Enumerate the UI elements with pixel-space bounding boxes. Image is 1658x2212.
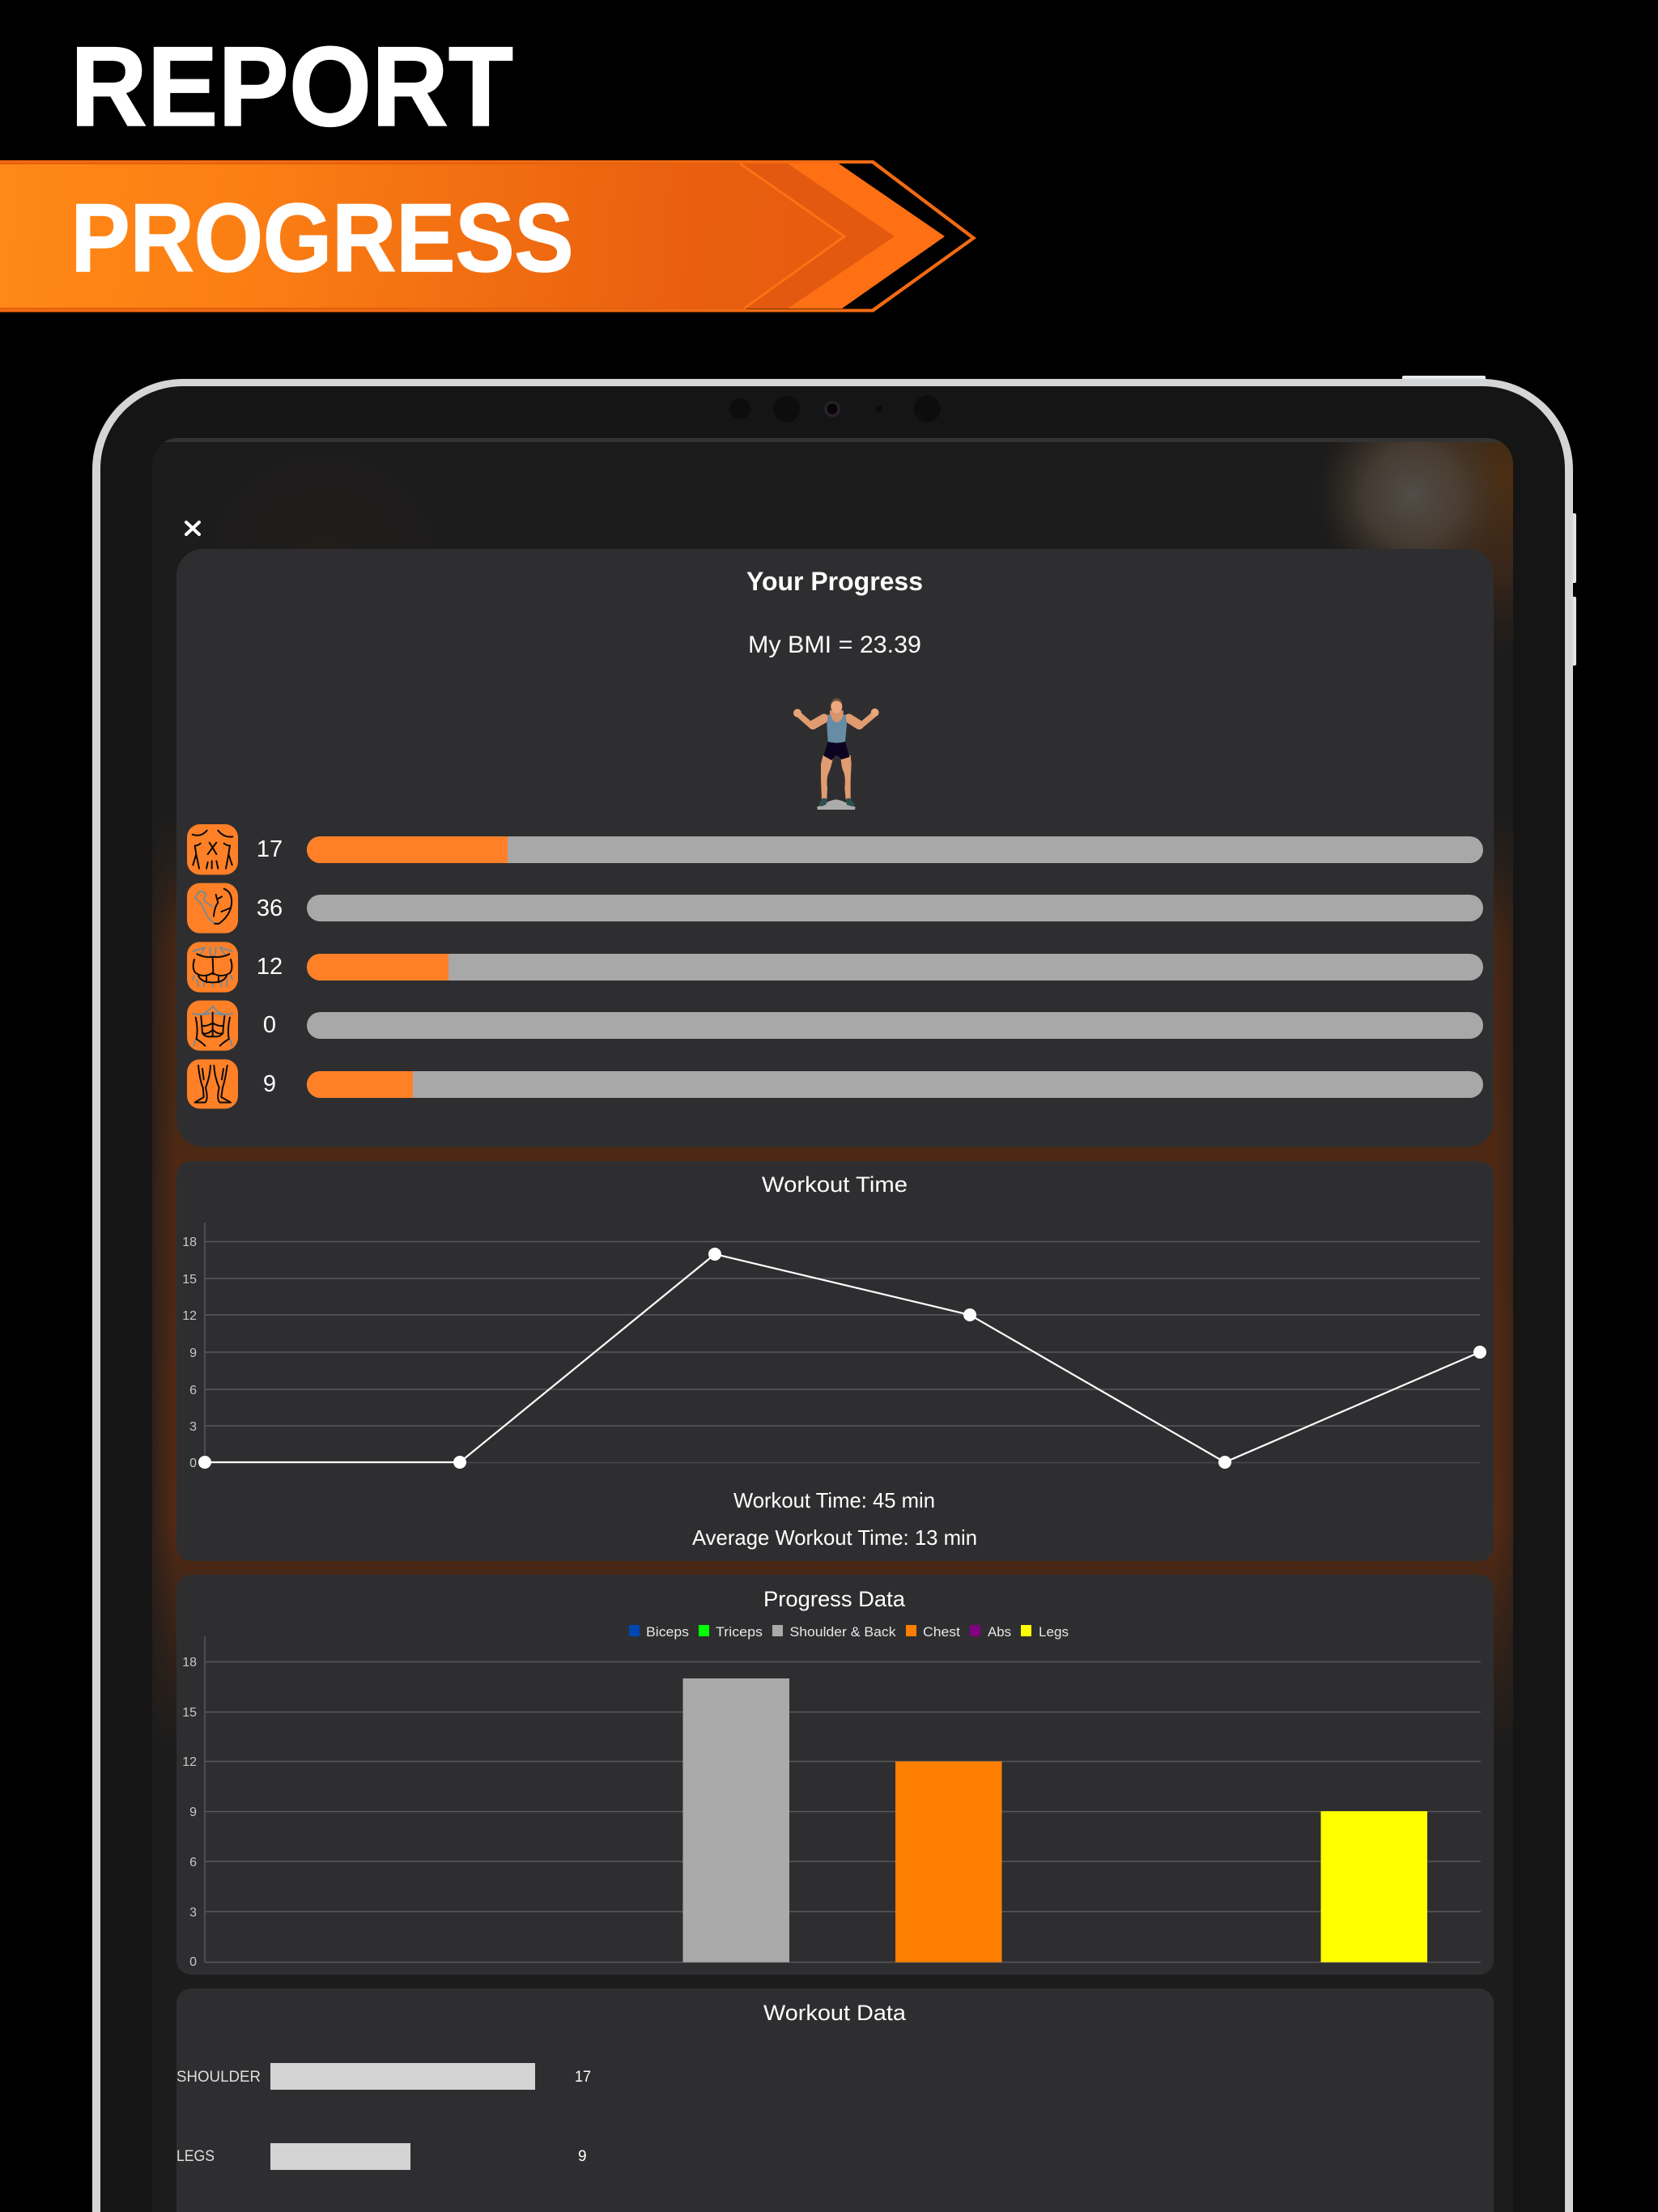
text: BMI value: My BMI = 23.39	[748, 632, 921, 658]
row: shoulder: 17	[575, 2069, 591, 2086]
bar chart: progress data: 0	[189, 1955, 197, 1969]
row: shoulder	[176, 2063, 591, 2090]
heading: your progress: Your Progress	[746, 567, 923, 596]
progress rows: muscle icons, values, bars	[187, 824, 1483, 1108]
row: legs: 9	[263, 1071, 276, 1097]
row: abs: 0	[263, 1012, 276, 1038]
icon: close X	[186, 522, 199, 534]
legend: muscle groups: Legs	[1039, 1624, 1069, 1640]
bar chart: progress data	[182, 1636, 1481, 1969]
banner: orange arrow ribbon with PROGRESS	[0, 160, 976, 313]
row: abs	[187, 1001, 1483, 1051]
row: arms	[187, 883, 1483, 934]
bar chart: progress data: 15	[182, 1706, 197, 1720]
banner: orange arrow ribbon with PROGRESS: PROGRESS	[71, 184, 573, 292]
line chart: workout time: 3	[189, 1420, 197, 1434]
heading: REPORT: REPORT	[70, 23, 513, 150]
panel: progress data	[176, 1575, 1494, 1975]
panel: your progress	[176, 549, 1494, 1147]
bar chart: progress data: 3	[189, 1906, 197, 1920]
row: chest: 12	[257, 954, 283, 980]
row: chest	[187, 942, 1483, 993]
tablet cameras and sensors	[729, 395, 941, 423]
line chart: workout time	[182, 1223, 1486, 1470]
heading: workout data: Workout Data	[763, 2001, 907, 2025]
line chart: workout time: 9	[189, 1346, 197, 1360]
panel: workout data	[176, 1989, 1494, 2212]
row: legs	[187, 1059, 1483, 1108]
line chart: workout time: 12	[182, 1309, 197, 1323]
row: shoulder: SHOULDER	[176, 2069, 261, 2086]
row: legs: 9	[578, 2148, 587, 2165]
illustration: flexing man on platform	[793, 698, 879, 810]
row: legs	[176, 2143, 587, 2170]
row: shoulder and back	[187, 824, 1483, 874]
line chart: workout time: 6	[189, 1384, 197, 1397]
row: shoulder and back: 17	[257, 836, 283, 862]
tablet device frame	[92, 376, 1576, 2212]
line chart: workout time: 15	[182, 1273, 197, 1287]
bar chart: progress data: 12	[182, 1755, 197, 1769]
line chart: workout time: 0	[189, 1457, 197, 1470]
legend: muscle groups: Biceps	[646, 1624, 689, 1640]
panel: workout time	[176, 1161, 1494, 1561]
bar chart: progress data: 6	[189, 1856, 197, 1870]
legend: muscle groups: Triceps	[716, 1624, 763, 1640]
text: total workout time: Workout Time: 45 min	[733, 1488, 935, 1512]
heading: progress data: Progress Data	[763, 1587, 906, 1611]
row: legs: LEGS	[176, 2148, 215, 2165]
line chart: workout time: 18	[182, 1236, 197, 1249]
text: average workout time: Average Workout Time: 13 min	[692, 1525, 977, 1550]
heading: workout time: Workout Time	[762, 1172, 908, 1197]
bar chart: progress data: 9	[189, 1806, 197, 1819]
tablet screen background with glow	[152, 438, 1513, 1744]
legend: muscle groups: Chest	[923, 1624, 960, 1640]
legend: muscle groups	[629, 1624, 1069, 1640]
bar chart: progress data: 18	[182, 1656, 197, 1670]
legend: muscle groups: Shoulder & Back	[790, 1624, 896, 1640]
row: arms: 36	[257, 895, 283, 921]
legend: muscle groups: Abs	[988, 1624, 1011, 1640]
